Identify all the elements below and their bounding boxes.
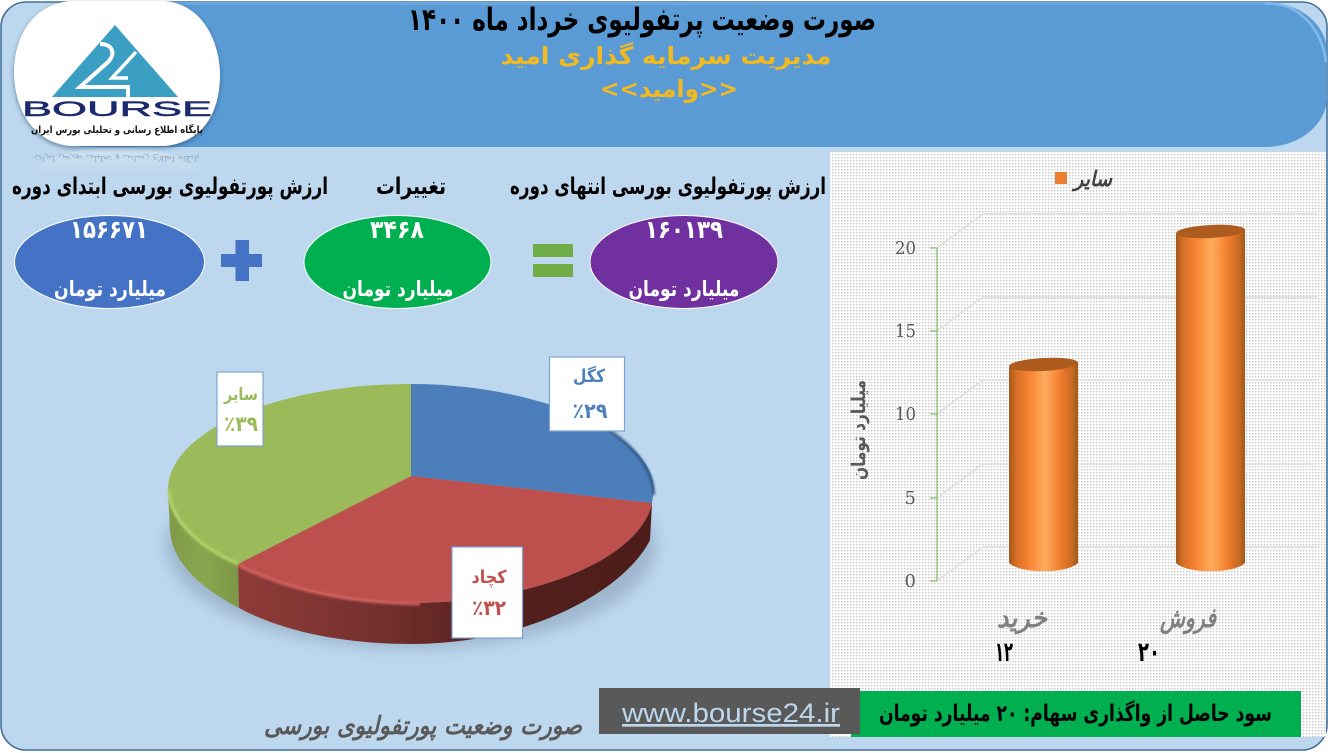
- logo wordmark: BOURSE: [22, 98, 212, 121]
- callout: profit from share sales: [851, 691, 1301, 737]
- category: sell: فروش: [1159, 603, 1217, 635]
- logo tagline: پایگاه اطلاع رسانی و تحلیلی بورس ایران: [31, 123, 203, 136]
- label: kgl 29%: [550, 357, 624, 431]
- oval: start value: [14, 215, 204, 308]
- y axis numbers: [895, 238, 916, 592]
- oval: end value: ۱۶۰۱۳۹: [645, 215, 723, 244]
- oval: changes: [304, 215, 491, 308]
- label: other 39%: سایر: [223, 385, 258, 405]
- panel: bar chart: [830, 152, 1326, 737]
- logo white badge: [14, 1, 220, 146]
- label: other 39%: [217, 372, 263, 446]
- value: sell: ۲۰: [1138, 637, 1160, 668]
- label: start value: ارزش پورتفولیوی بورسی ابتدای دوره: [12, 174, 328, 200]
- title: صورت وضعیت پرتفولیوی خرداد ماه ۱۴۰۰: [408, 2, 876, 38]
- logo shadow: [14, 3, 220, 148]
- 3D pie chart: [166, 357, 656, 649]
- footer caption: صورت وضعیت پورتفولیوی بورسی: [264, 711, 583, 741]
- header banner: [25, 2, 1327, 147]
- chart legend: [1055, 167, 1113, 192]
- oval: start value: ۱۵۶۶۷۱: [70, 215, 148, 244]
- y axis numbers: 0: [905, 571, 916, 592]
- bar: sell: [1176, 223, 1245, 571]
- pie slice: red: [238, 476, 652, 603]
- label: changes: تغییرات: [376, 174, 446, 200]
- y axis title: میلیارد تومان: [848, 380, 870, 480]
- oval: end value: میلیارد تومان: [628, 277, 740, 301]
- label: kechad 32%: ٪۳۲: [472, 596, 506, 620]
- logo reflected tagline: پایگاه اطلاع رسانی و تحلیلی بورس ایران: [34, 154, 200, 164]
- y axis numbers: 10: [895, 404, 916, 425]
- category: buy: خرید: [997, 603, 1048, 635]
- oval: start value: میلیارد تومان: [54, 277, 166, 301]
- label: end value: ارزش پورتفولیوی بورسی انتهای دوره: [510, 174, 826, 200]
- icon: plus: [221, 240, 262, 281]
- oval: changes: میلیارد تومان: [342, 277, 454, 301]
- logo: [14, 1, 220, 176]
- pie slice: blue: [411, 384, 654, 503]
- logo reflection: [28, 148, 206, 176]
- pie side: green: [168, 490, 239, 608]
- subtitle: مدیریت سرمایه گذاری امید: [500, 42, 832, 70]
- bar: buy: [1009, 356, 1078, 571]
- chart legend: سایر: [1071, 167, 1113, 192]
- icon: equals: [533, 244, 573, 277]
- oval: changes: ۳۴۶۸: [370, 215, 424, 244]
- website link box: www.bourse24.ir: [621, 698, 840, 728]
- pie side: red: [238, 503, 652, 644]
- logo triangle mark: [52, 25, 178, 97]
- label: kgl 29%: ٪۲۹: [572, 399, 608, 423]
- chart gridlines and axis: [930, 214, 1317, 581]
- label: kgl 29%: کگل: [573, 365, 605, 387]
- pie slice: green: [168, 384, 411, 564]
- y axis numbers: 15: [895, 321, 916, 342]
- y axis numbers: 20: [895, 238, 916, 259]
- subtitle ticker: <<وامید>>: [600, 75, 738, 103]
- label: kechad 32%: کچاد: [472, 567, 507, 588]
- y axis numbers: 5: [905, 488, 916, 509]
- value: buy: ۱۲: [995, 637, 1013, 668]
- label: kechad 32%: [452, 547, 522, 638]
- website link box: [599, 688, 860, 734]
- oval: end value: [590, 215, 778, 308]
- label: other 39%: ٪۳۹: [224, 412, 258, 436]
